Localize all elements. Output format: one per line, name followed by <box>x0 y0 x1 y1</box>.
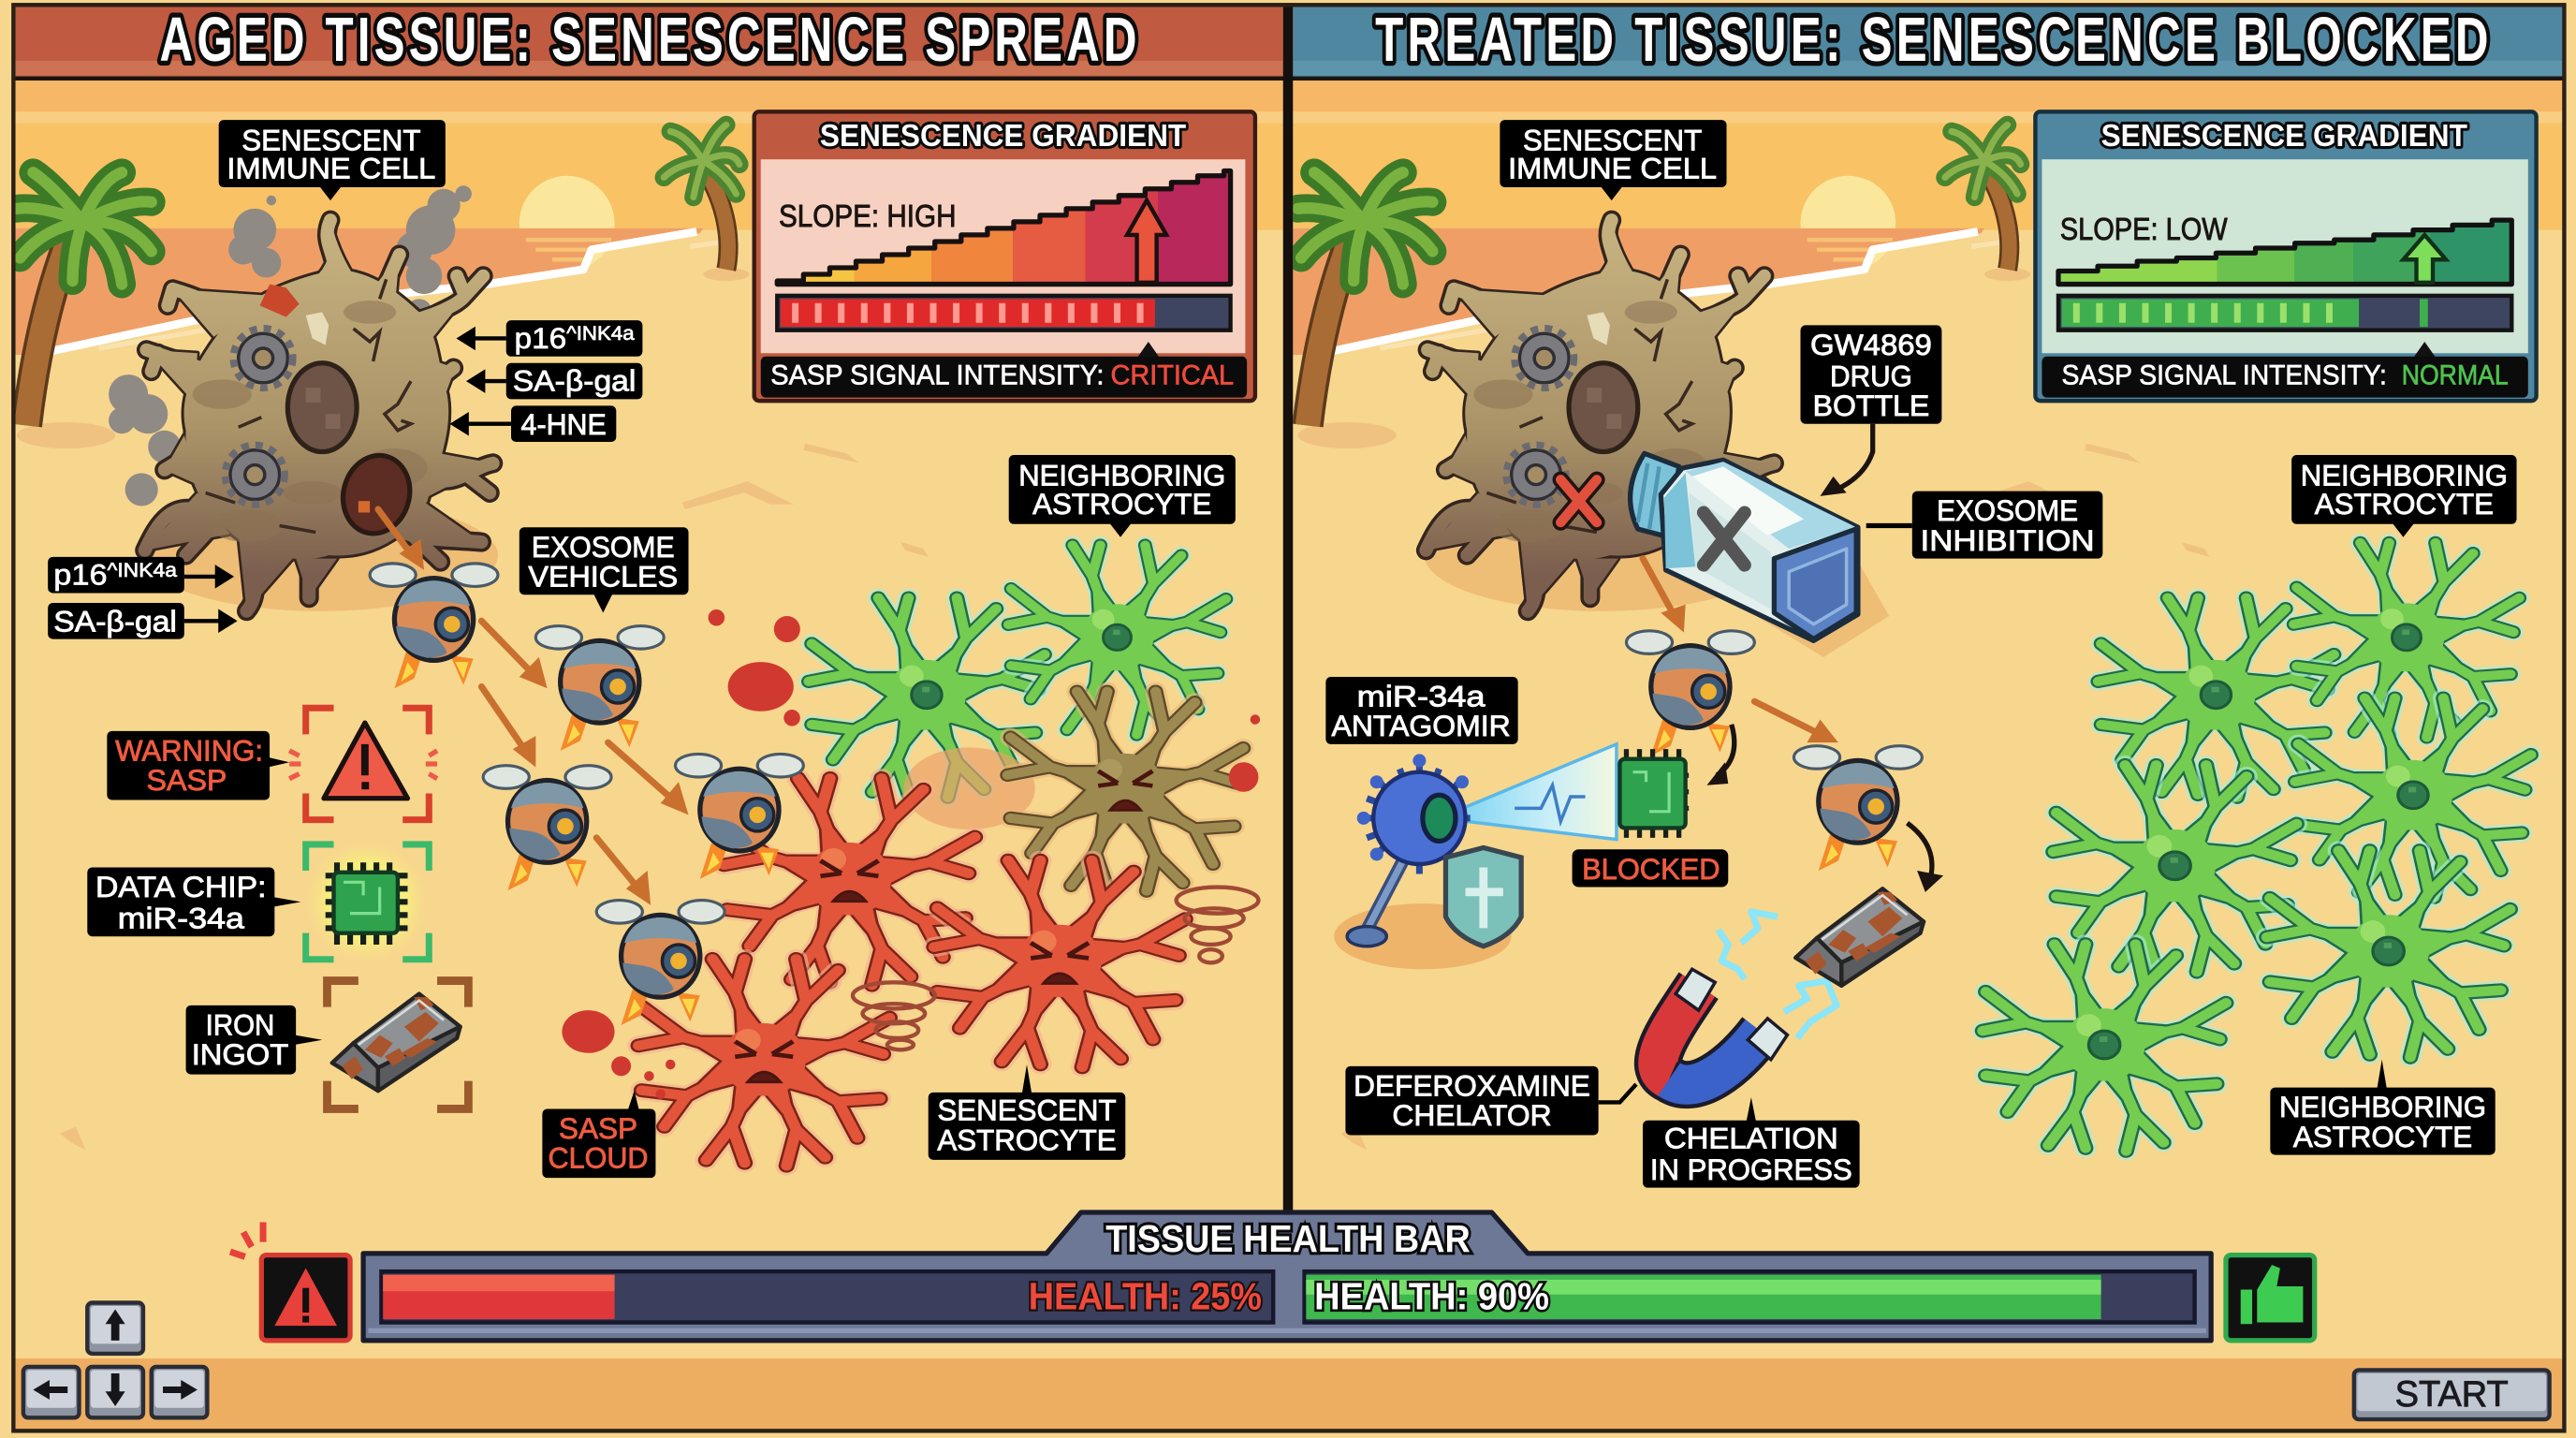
key faces <box>26 1306 204 1408</box>
label: deferoxamine chelator <box>1345 1066 1636 1136</box>
olive astrocyte <box>1007 692 1243 891</box>
label: GW4869 drug bottle: DRUG <box>1830 359 1912 392</box>
blocked chip <box>1618 749 1689 838</box>
antagomir beam <box>1439 744 1617 840</box>
label: SA-beta-gal left: SA-β-gal <box>53 605 177 638</box>
label: antagomir: ANTAGOMIR <box>1332 709 1511 742</box>
data chip in green frame <box>300 836 432 968</box>
gradient panel: aged: SENESCENCE GRADIENT <box>820 119 1186 154</box>
start button <box>2354 1370 2550 1419</box>
label: SA-beta-gal right <box>470 363 642 399</box>
label: chelation in progress <box>1643 1097 1860 1188</box>
bleeding wound <box>260 285 300 317</box>
label: neighboring astrocyte (treated lower): ASTROCYTE <box>2293 1120 2472 1153</box>
label: senescent astrocyte <box>929 1064 1125 1160</box>
label: warning SASP: SASP <box>146 763 227 797</box>
SASP tornadoes <box>853 888 1258 1049</box>
panel: treated tissue scene <box>1293 81 2563 1150</box>
center divider <box>1283 5 1293 1221</box>
gradient panel: aged: CRITICAL <box>1110 360 1234 391</box>
label: warning SASP <box>107 731 289 800</box>
label: neighboring astrocyte (treated upper) <box>2291 455 2517 537</box>
exosome drones (aged) <box>370 564 803 1025</box>
header: aged: AGED TISSUE: SENESCENCE SPREAD <box>160 6 1137 75</box>
label: senescent astrocyte: SENESCENT <box>937 1093 1117 1127</box>
label: 4-HNE <box>454 405 616 442</box>
senescent immune cell (aged) <box>143 220 498 611</box>
blocking arrows <box>1717 424 1932 879</box>
label: antagomir <box>1325 677 1518 744</box>
senescent astrocytes <box>638 778 1185 1166</box>
lightning <box>1719 912 1837 1038</box>
label: p16 right <box>461 320 642 357</box>
label: SA-beta-gal right: SA-β-gal <box>513 364 636 398</box>
tab title: TISSUE HEALTH BAR <box>1105 1217 1471 1260</box>
label: iron ingot <box>186 1005 322 1075</box>
gradient panel: aged: SASP SIGNAL INTENSITY: <box>770 360 1104 391</box>
label: GW4869 drug bottle: GW4869 <box>1810 328 1932 361</box>
label: p16 left <box>48 557 230 593</box>
slope chart <box>777 170 1231 285</box>
exosome drones (treated) <box>1626 631 1922 871</box>
signal bar <box>2058 296 2511 330</box>
label: exosome vehicles: EXOSOME <box>532 530 675 564</box>
label: p16 left: ^INK4a <box>108 560 177 581</box>
senescent immune cell (treated) <box>1425 220 1779 611</box>
label: deferoxamine chelator: CHELATOR <box>1392 1098 1552 1132</box>
label: senescent immune cell (treated) <box>1500 120 1727 200</box>
iron ingot chelated <box>1795 888 1924 986</box>
arrows: exosome travel <box>378 509 1823 894</box>
label: neighboring astrocyte (aged) <box>1009 455 1236 537</box>
warning icon in red frame <box>289 708 437 820</box>
slope label: SLOPE: HIGH <box>779 199 957 234</box>
label: data chip <box>87 867 300 936</box>
label: GW4869 drug bottle <box>1800 325 1941 424</box>
label: neighboring astrocyte (treated upper): ASTROCYTE <box>2315 487 2494 521</box>
red stain <box>903 747 1035 829</box>
gradient panel: aged <box>754 111 1255 401</box>
right health meter <box>1305 1271 2195 1323</box>
healthy astrocytes (treated) <box>1983 543 2531 1151</box>
label: senescent immune cell (aged): SENESCENT <box>242 124 421 157</box>
bottle shadow <box>1676 559 1889 657</box>
exosome pit <box>334 448 418 541</box>
warning indicator <box>230 1223 350 1341</box>
label: exosome inhibition <box>1866 492 2102 559</box>
label: senescent immune cell (aged) <box>219 120 446 200</box>
up arrow <box>2403 235 2446 283</box>
label: iron ingot: INGOT <box>192 1037 288 1071</box>
bottom control strip <box>15 1358 2563 1430</box>
gradient panel: treated: SENESCENCE GRADIENT <box>2101 119 2467 154</box>
panel: aged tissue scene <box>15 81 1283 1150</box>
GW4869 drug bottle <box>1631 453 1858 640</box>
header: treated: TREATED TISSUE: SENESCENCE BLOCKED <box>1375 6 2489 75</box>
label: 4-HNE: 4-HNE <box>521 407 607 441</box>
label: SASP cloud: CLOUD <box>548 1141 649 1175</box>
slope chart <box>2058 220 2511 285</box>
label: p16 right: p16 <box>515 321 564 355</box>
slope label: SLOPE: LOW <box>2060 213 2228 247</box>
signal bar <box>777 296 1231 330</box>
tissue health bar: HEALTH: 90% <box>1314 1275 1549 1318</box>
left health meter <box>381 1271 1273 1323</box>
gradient panel: treated <box>2035 111 2537 401</box>
label: senescent astrocyte: ASTROCYTE <box>937 1123 1117 1156</box>
label: warning SASP: WARNING: <box>115 733 263 767</box>
sasp intensity <box>2042 357 2528 398</box>
thumbs-up indicator <box>2226 1255 2315 1341</box>
start button: START <box>2395 1374 2509 1415</box>
label: neighboring astrocyte (treated lower) <box>2270 1060 2496 1155</box>
label: neighboring astrocyte (treated lower): NEIGHBORING <box>2279 1090 2486 1123</box>
sasp intensity <box>761 357 1247 398</box>
key arrows <box>33 1310 198 1406</box>
label: neighboring astrocyte (aged): NEIGHBORING <box>1018 459 1225 492</box>
label: antagomir: miR-34a <box>1357 680 1486 713</box>
tissue health bar: HEALTH: 25% <box>1029 1275 1262 1318</box>
label: senescent immune cell (treated): SENESCENT <box>1523 124 1702 157</box>
label: chelation in progress: CHELATION <box>1664 1122 1838 1155</box>
label: iron ingot: IRON <box>206 1007 274 1041</box>
smoke plumes <box>109 185 472 506</box>
label: senescent immune cell (treated): IMMUNE CELL <box>1508 151 1717 184</box>
label: SA-beta-gal left <box>48 603 233 639</box>
iron ingot in frame <box>327 981 468 1108</box>
pointer <box>2413 342 2437 359</box>
label: p16 left: p16 <box>53 558 103 592</box>
red X block <box>1560 479 1597 522</box>
label: neighboring astrocyte (treated upper): NEIGHBORING <box>2301 459 2508 492</box>
label: neighboring astrocyte (aged): ASTROCYTE <box>1032 487 1211 521</box>
tissue health bar <box>363 1212 2211 1341</box>
SASP blobs and debris <box>562 609 1260 1099</box>
label: chelation in progress: IN PROGRESS <box>1650 1152 1852 1186</box>
label: exosome inhibition: EXOSOME <box>1937 493 2078 527</box>
gradient panel: treated: NORMAL <box>2402 360 2509 391</box>
label: exosome inhibition: INHIBITION <box>1921 523 2095 557</box>
label: exosome vehicles: VEHICLES <box>528 559 678 593</box>
label: SASP cloud <box>542 1091 655 1178</box>
label: data chip: DATA CHIP: <box>95 870 267 903</box>
label: GW4869 drug bottle: BOTTLE <box>1813 389 1929 422</box>
label: blocked: BLOCKED <box>1582 852 1720 886</box>
green neighbour astrocytes (aged) <box>809 545 1226 798</box>
label: SASP cloud: SASP <box>559 1111 637 1145</box>
pointer <box>1137 342 1160 359</box>
label: data chip: miR-34a <box>118 901 244 934</box>
label: senescent immune cell (aged): IMMUNE CELL <box>227 151 435 184</box>
label: exosome vehicles <box>520 527 689 613</box>
horseshoe magnet <box>1658 969 1787 1085</box>
label: p16 right: ^INK4a <box>566 323 635 345</box>
miR-34a antagomir character <box>1334 754 1521 969</box>
label: deferoxamine chelator: DEFEROXAMINE <box>1354 1068 1590 1102</box>
up arrow <box>1127 200 1166 283</box>
gradient panel: treated: SASP SIGNAL INTENSITY: <box>2061 360 2387 391</box>
direction keys <box>23 1302 207 1417</box>
arrowheads <box>1706 477 1943 892</box>
